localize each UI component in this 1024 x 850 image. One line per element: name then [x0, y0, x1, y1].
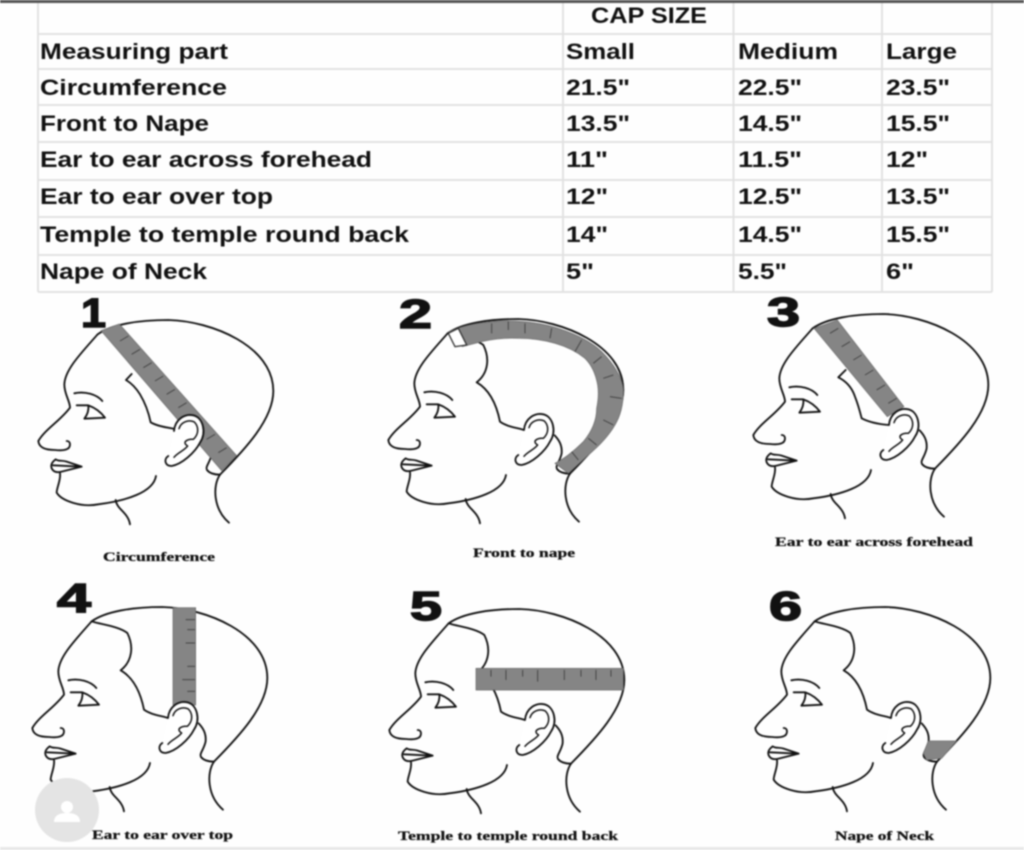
row: ear to ear over top: Ear to ear over top: [40, 184, 273, 209]
head with nape tape: [755, 607, 990, 811]
caption: Temple to temple round back: [398, 829, 618, 843]
row: nape of neck: 6": [886, 259, 914, 284]
head with vertical tape: [32, 607, 267, 811]
caption: Ear to ear over top: [92, 828, 233, 842]
row: front to nape: 14.5": [738, 111, 802, 136]
table header row: Small: [566, 39, 635, 64]
row: ear to ear over top: 12": [566, 184, 608, 209]
diagram 1: circumference: [38, 290, 273, 564]
row: temple to temple round back: [40, 222, 950, 247]
number 3: 3: [767, 289, 800, 335]
head with horizontal tape: [389, 609, 624, 813]
number 6: 6: [769, 583, 802, 629]
row: ear to ear across forehead: 12": [886, 147, 928, 172]
row: ear to ear across forehead: Ear to ear across forehead: [40, 147, 372, 172]
head with forehead tape: [753, 314, 988, 518]
avatar badge overlay: [35, 778, 99, 842]
diagram 5: temple to temple round back: [389, 583, 624, 843]
row: ear to ear across forehead: 11": [566, 147, 608, 172]
row: circumference: 22.5": [738, 75, 802, 100]
diagram 4: ear to ear over top: [32, 575, 267, 842]
row: ear to ear over top: 12.5": [738, 184, 802, 209]
number 4: 4: [57, 575, 91, 621]
row: circumference: 21.5": [566, 75, 630, 100]
row: nape of neck: Nape of Neck: [40, 259, 208, 284]
caption: Circumference: [103, 550, 216, 564]
row: front to nape: [40, 111, 950, 136]
bottom light edge bar: [0, 847, 1024, 850]
caption: Nape of Neck: [835, 829, 934, 843]
row: ear to ear across forehead: 11.5": [738, 147, 802, 172]
row: circumference: Circumference: [40, 75, 227, 100]
row: temple to temple round back: 15.5": [886, 222, 950, 247]
caption: Ear to ear across forehead: [775, 535, 973, 549]
row: temple to temple round back: 14.5": [738, 222, 802, 247]
number 1: 1: [81, 290, 106, 336]
head with curved tape: [388, 319, 623, 523]
row: nape of neck: 5.5": [738, 259, 787, 284]
row: temple to temple round back: Temple to temple round back: [40, 222, 410, 247]
table heading: cap size: CAP SIZE: [591, 3, 707, 28]
diagram 2: front to nape: [388, 291, 623, 560]
row: nape of neck: 5": [566, 259, 594, 284]
row: front to nape: Front to Nape: [40, 111, 209, 136]
head with diagonal tape: [38, 320, 273, 524]
diagram 6: nape of neck: [755, 583, 990, 843]
row: ear to ear over top: 13.5": [886, 184, 950, 209]
row: ear to ear over top: [40, 184, 950, 209]
caption: Front to nape: [473, 546, 576, 560]
row: nape of neck: [40, 259, 914, 284]
diagram 3: ear to ear across forehead: [753, 289, 988, 549]
row: circumference: 23.5": [886, 75, 950, 100]
row: ear to ear across forehead: [40, 147, 928, 172]
row: circumference: [40, 75, 950, 100]
row: front to nape: 15.5": [886, 111, 950, 136]
row: temple to temple round back: 14": [566, 222, 608, 247]
table header row: Large: [886, 39, 957, 64]
table header row: Measuring part: [40, 39, 229, 64]
number 5: 5: [410, 583, 442, 629]
top dark edge bar: [0, 0, 1024, 3]
cap size table: [38, 3, 992, 292]
row: front to nape: 13.5": [566, 111, 630, 136]
table header row: [40, 39, 957, 64]
number 2: 2: [399, 291, 432, 337]
table header row: Medium: [738, 39, 838, 64]
